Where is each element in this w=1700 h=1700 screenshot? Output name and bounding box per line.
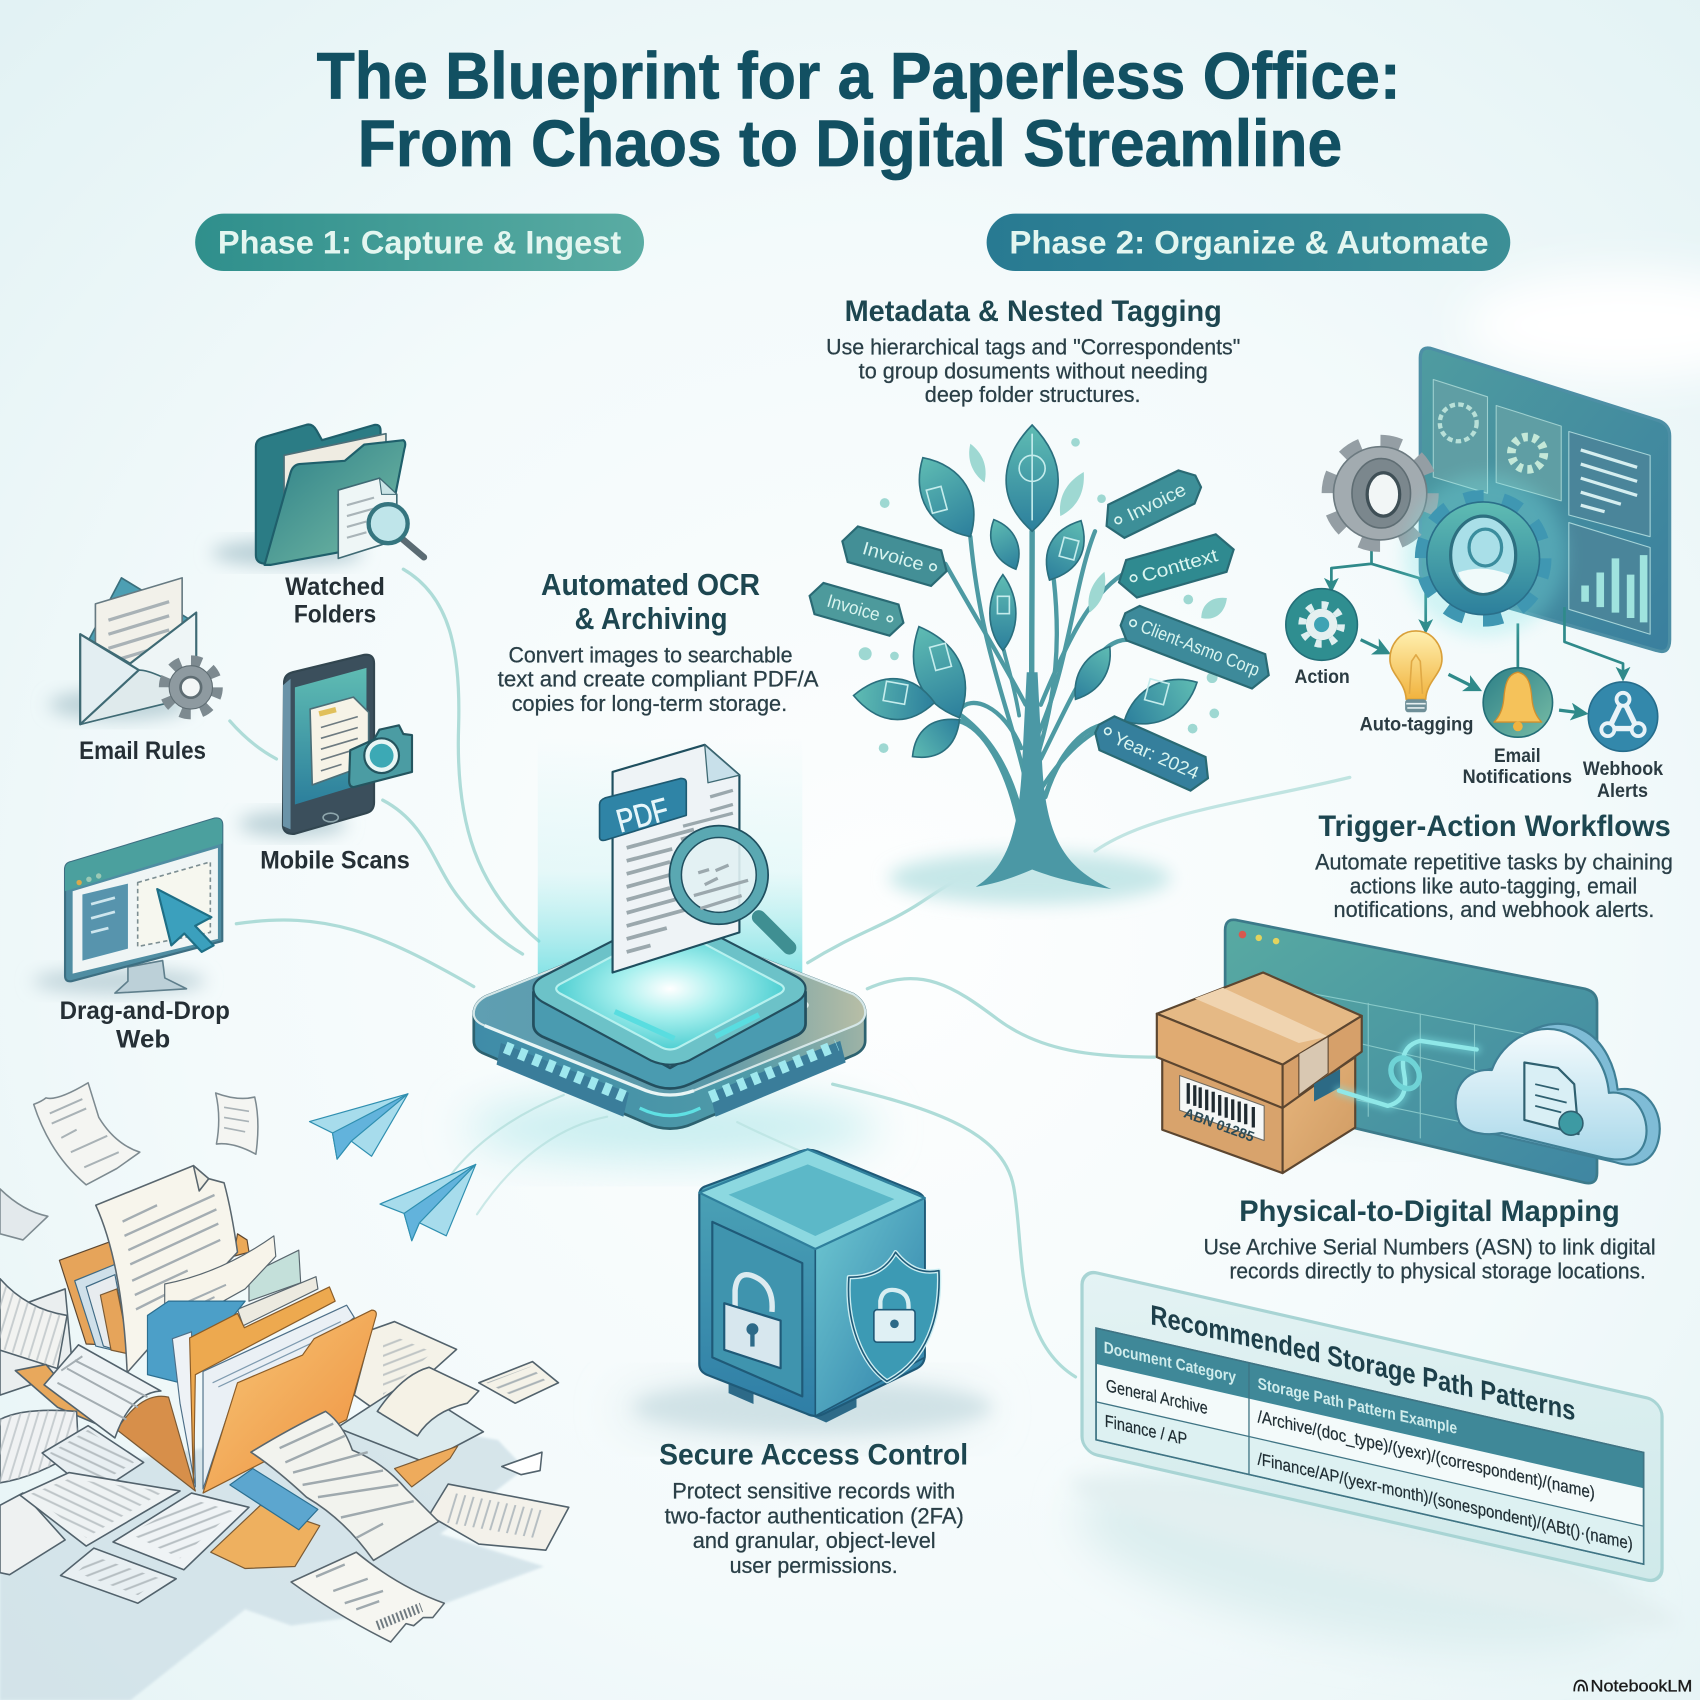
connector arrows [1331, 548, 1623, 713]
workflow step labels: Email [1494, 746, 1541, 767]
text: ocr description: copies for long-term storage. [512, 691, 787, 716]
connector lines [230, 569, 1350, 1377]
heading: automated ocr [541, 569, 760, 636]
text: mapping description: records directly to physical storage locations. [1229, 1258, 1646, 1283]
back of folder and contents [59, 1234, 249, 1354]
dashboard panel [1420, 348, 1670, 651]
receipt on floor [291, 1552, 444, 1642]
orange mid folder [190, 1287, 335, 1485]
title: From Chaos to Digital Streamline [358, 107, 1342, 181]
table body [1096, 1328, 1644, 1564]
table body: /Finance/AP/(yexr-month)/(sonespondent)/(ABt()·(name) [1258, 1449, 1633, 1554]
text: ocr description [498, 642, 819, 716]
label: drag-and-drop web: Web [116, 1025, 170, 1053]
grey gear [1329, 442, 1431, 544]
base plate [474, 927, 865, 1129]
table title: Recommended Storage Path Patterns [1150, 1299, 1575, 1428]
floor shadow [0, 1420, 544, 1700]
heading: trigger-action workflows: Trigger-Action Workflows [1318, 811, 1671, 843]
workflow step labels: Notifications [1463, 767, 1572, 788]
teal gear [1404, 474, 1567, 636]
heading: physical-to-digital mapping: Physical-to-Digital Mapping [1239, 1196, 1620, 1228]
draped paper [251, 1411, 439, 1560]
blue folder [147, 1301, 245, 1383]
text: workflows description [1315, 850, 1673, 922]
text: access control description [665, 1478, 964, 1578]
icon: email rules [49, 578, 216, 724]
text: access control description: user permissions. [730, 1553, 898, 1578]
workflow step labels: Alerts [1597, 781, 1648, 802]
text: metadata description: to group dosuments without needing [859, 358, 1208, 383]
text: workflows description: actions like auto-tagging, email [1350, 873, 1637, 898]
magnifying glass [669, 826, 789, 948]
tag: year [1090, 712, 1215, 795]
white file stack [203, 1305, 354, 1489]
tag: invoice left one: Invoice [860, 537, 927, 575]
pale leaves and dots [859, 438, 1232, 753]
phase 2 pill [987, 214, 1510, 271]
label: drag-and-drop web [60, 997, 230, 1053]
under-folders [211, 1446, 458, 1569]
table body: General Archive [1106, 1375, 1208, 1418]
tall paper [96, 1166, 237, 1373]
workflow step labels: Action [1295, 667, 1350, 688]
leaf doc marks [883, 434, 1169, 705]
upper tray [533, 917, 806, 1089]
text: mapping description [1203, 1234, 1656, 1283]
floating receipt [0, 1083, 258, 1240]
second sheet and mint tab [165, 1236, 318, 1334]
tag: client: Client-Asmo Corp [1138, 615, 1263, 680]
tag: context [1114, 531, 1239, 601]
heading: metadata and nested tagging: Metadata & Nested Tagging [845, 296, 1222, 328]
label: watched folders: Watched [285, 573, 385, 601]
front orange folder [203, 1310, 376, 1493]
label: drag-and-drop web: Drag-and-Drop [60, 997, 230, 1025]
paper planes [309, 1094, 476, 1241]
label: mobile scans: Mobile Scans [260, 846, 410, 874]
notebooklm mark: NotebookLM [1590, 1677, 1692, 1695]
chaotic paper pile [0, 1083, 569, 1700]
label: watched folders: Folders [294, 600, 376, 628]
icon: mobile scans [239, 655, 412, 837]
storage path table card [1071, 1267, 1678, 1649]
table body: Storage Path Pattern Example [1258, 1375, 1457, 1438]
loose sheets under folder [0, 1279, 569, 1603]
action circle [1286, 589, 1357, 660]
heading: automated ocr: Automated OCR [541, 569, 760, 602]
pdf document [600, 745, 739, 973]
bell circle [1483, 668, 1553, 737]
light beam [538, 737, 802, 981]
trunk and branches [932, 531, 1128, 835]
workflow step labels: Webhook [1583, 759, 1664, 780]
cloud with document [1456, 1024, 1660, 1165]
label: email rules: Email Rules [79, 737, 206, 765]
text: workflows description: notifications, and webhook alerts. [1334, 897, 1654, 922]
workflow dashboard and gears [1286, 348, 1670, 751]
curled sheet [44, 1345, 161, 1438]
title [317, 40, 1401, 181]
barcode box [1157, 973, 1362, 1173]
tag: client [1116, 602, 1275, 692]
tag: invoice top right: Invoice [1123, 479, 1189, 525]
text: workflows description: Automate repetitive tasks by chaining [1315, 850, 1673, 875]
table body: Finance / AP [1105, 1411, 1187, 1449]
tag: invoice left two: Invoice [825, 590, 883, 625]
tag: invoice left one [837, 524, 952, 589]
text: metadata description: Use hierarchical tags and "Correspondents" [826, 335, 1240, 360]
heading: automated ocr: & Archiving [575, 603, 727, 636]
workflow step labels: Auto-tagging [1360, 715, 1473, 736]
tag: year: Year: 2024 [1111, 727, 1202, 783]
phase 2 pill: Phase 2: Organize & Automate [1009, 225, 1489, 261]
text: mapping description: Use Archive Serial Numbers (ASN) to link digital [1203, 1234, 1656, 1259]
label: watched folders [285, 573, 385, 628]
lightbulb [1390, 631, 1442, 712]
table body: /Archive/(doc_type)/(yexr)/(correspondent)/(name) [1258, 1406, 1595, 1504]
text: metadata description [826, 335, 1240, 407]
tree of nested tags [805, 425, 1275, 904]
central ocr platform [474, 737, 865, 1129]
text: access control description: two-factor authentication (2FA) [665, 1503, 964, 1528]
phase 1 pill [195, 214, 644, 271]
text: access control description: and granular, object-level [693, 1528, 936, 1553]
barcode box: ABN 01285 [1182, 1104, 1257, 1145]
glowing link [1339, 1041, 1477, 1106]
vault: secure access control [634, 1149, 992, 1431]
text: ocr description: text and create compliant PDF/A [498, 666, 819, 691]
text: ocr description: Convert images to searchable [508, 642, 793, 667]
left white stack [172, 1332, 195, 1487]
front left folder flap [117, 1396, 195, 1491]
icon: drag-and-drop monitor [33, 818, 222, 994]
pdf document: PDF [613, 791, 672, 839]
leaves [852, 425, 1205, 768]
phase 1 pill: Phase 1: Capture & Ingest [218, 225, 621, 261]
tag: invoice left two [805, 580, 908, 638]
text: metadata description: deep folder structures. [925, 382, 1141, 407]
tag: context: Conttext [1139, 544, 1220, 586]
title: The Blueprint for a Paperless Office: [317, 40, 1401, 114]
browser window [1225, 920, 1597, 1183]
text: access control description: Protect sensitive records with [672, 1478, 955, 1503]
heading: secure access control: Secure Access Control [659, 1440, 968, 1472]
icon: watched folders [211, 425, 424, 566]
workflow step labels [1295, 667, 1664, 802]
webhook circle [1588, 682, 1658, 751]
tag: invoice top right [1098, 465, 1206, 543]
table body: Document Category [1104, 1339, 1237, 1387]
physical-to-digital illustration [1157, 920, 1660, 1183]
